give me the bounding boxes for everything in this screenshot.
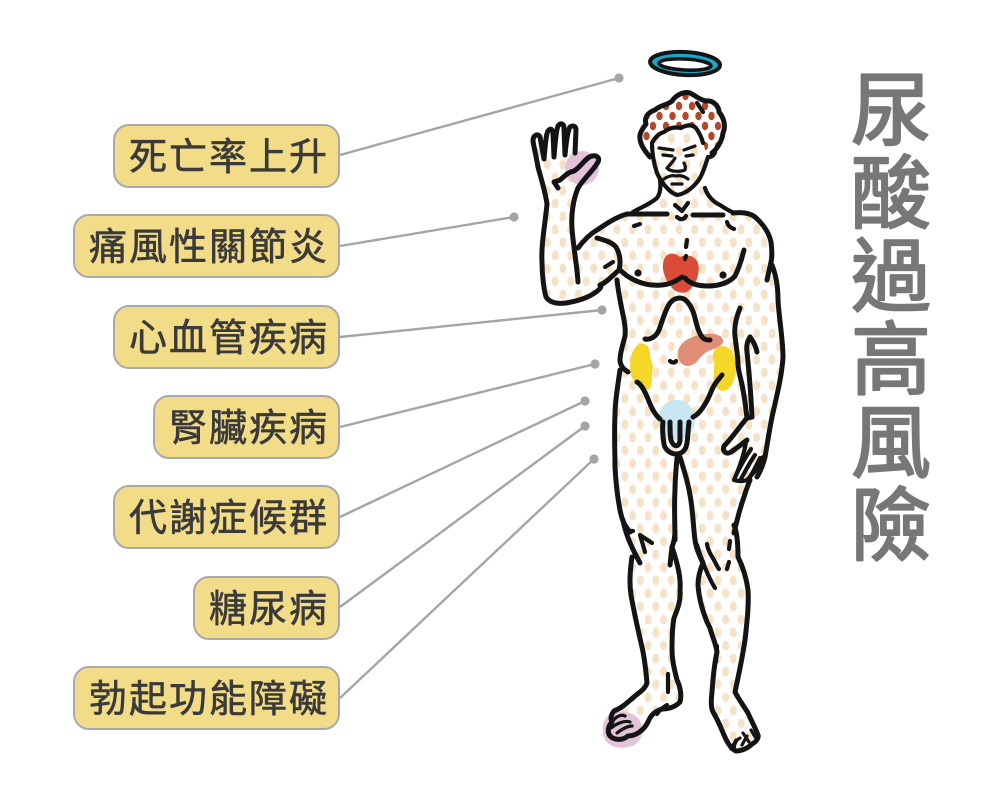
title: 風 — [851, 399, 931, 488]
label: 勃起功能障礙 — [74, 667, 339, 729]
legs and feet — [608, 457, 758, 751]
organ: pancreas — [678, 334, 723, 366]
organ: bladder — [658, 400, 695, 440]
label: 代謝症候群: 代謝症候群 — [129, 498, 329, 540]
label: 糖尿病 — [194, 577, 339, 639]
organ: heart — [663, 253, 699, 293]
chest — [620, 240, 744, 286]
title: 過 — [851, 233, 931, 322]
label: 痛風性關節炎: 痛風性關節炎 — [89, 227, 329, 269]
arm and hand outline — [533, 124, 783, 477]
label: 糖尿病: 糖尿病 — [209, 589, 329, 631]
halo — [649, 50, 721, 77]
label: 死亡率上升: 死亡率上升 — [129, 137, 329, 179]
label: 勃起功能障礙: 勃起功能障礙 — [89, 679, 329, 721]
label: 心血管疾病: 心血管疾病 — [129, 318, 329, 360]
highlight: foot gout — [603, 712, 642, 748]
title: 尿 — [851, 67, 931, 156]
title — [851, 67, 931, 571]
right arm inner and hand — [724, 308, 763, 481]
label: 代謝症候群 — [114, 486, 339, 548]
organ: left kidney — [630, 344, 653, 389]
label: 心血管疾病 — [114, 306, 339, 368]
label: 腎臟疾病: 腎臟疾病 — [169, 408, 329, 450]
risk labels — [74, 125, 339, 729]
title: 險 — [851, 482, 931, 571]
title: 高 — [851, 316, 931, 405]
neck and collar — [633, 180, 735, 219]
body dot fill — [534, 125, 783, 750]
torso and abdomen lines — [615, 280, 722, 532]
highlight: hand gout — [565, 151, 599, 185]
title: 酸 — [851, 150, 931, 239]
hair — [640, 92, 724, 157]
label: 腎臟疾病 — [154, 396, 339, 458]
human body figure — [533, 50, 783, 751]
organ: right kidney — [713, 346, 736, 391]
leader lines — [340, 73, 624, 698]
label: 痛風性關節炎 — [74, 215, 339, 277]
label: 死亡率上升 — [114, 125, 339, 187]
face — [652, 143, 715, 195]
